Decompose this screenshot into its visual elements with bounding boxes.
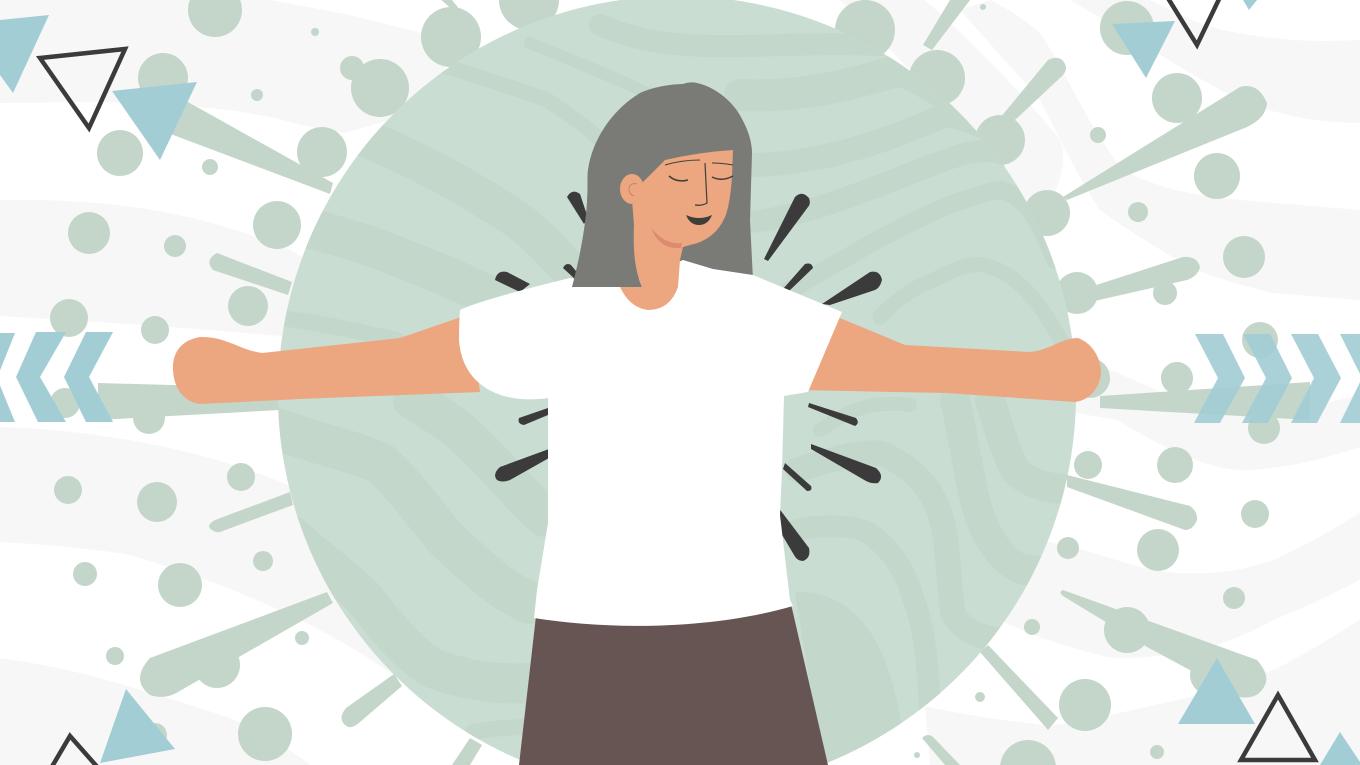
droplets xyxy=(188,0,242,37)
neck and face xyxy=(620,150,733,310)
virus: body lower right inner patch xyxy=(828,723,901,762)
virus: main body xyxy=(278,0,1076,765)
left arm xyxy=(173,314,480,404)
ear xyxy=(620,174,644,204)
shirt xyxy=(459,260,842,626)
eyes xyxy=(669,176,733,181)
chevrons right xyxy=(1194,334,1360,423)
chin shadow xyxy=(651,228,682,248)
burst lines around the woman xyxy=(495,192,882,561)
hair back xyxy=(572,82,753,287)
virus: body wave texture xyxy=(265,25,1085,765)
right arm xyxy=(800,316,1101,402)
ear detail xyxy=(629,184,637,196)
skirt xyxy=(519,604,828,765)
mouth xyxy=(686,215,712,225)
woman xyxy=(173,82,1101,765)
spikes xyxy=(160,92,333,194)
nose xyxy=(695,163,707,205)
eyebrows xyxy=(665,160,733,165)
hair front left xyxy=(572,122,645,287)
chevrons left xyxy=(0,332,113,422)
